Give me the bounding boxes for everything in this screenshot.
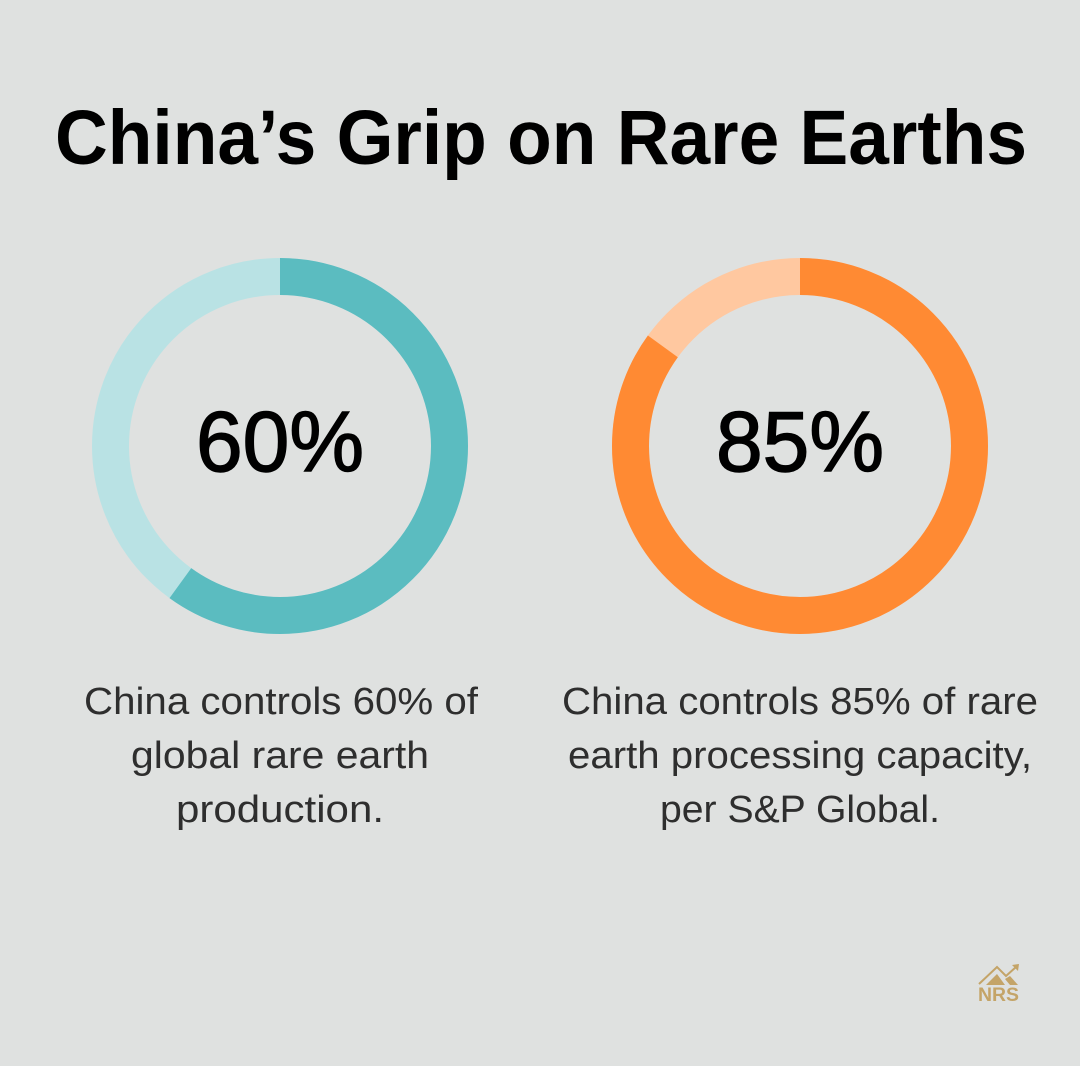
description: 85%: earth processing capacity,	[568, 735, 1032, 777]
description: 60%: production.	[176, 789, 384, 831]
description: 85%: China controls 85% of rare	[562, 681, 1038, 723]
icon: NRS logo: NRS	[978, 985, 1019, 1006]
description: 60%: China controls 60% of	[84, 681, 478, 723]
title: China’s Grip on Rare Earths	[55, 95, 1027, 181]
stat: 60%: 60%	[196, 395, 364, 490]
donut chart: 85%	[630, 276, 970, 616]
panel: 85% processing	[562, 276, 1038, 831]
panel: 60% production	[84, 276, 478, 831]
description: 60%	[84, 681, 478, 831]
description: 85%	[562, 681, 1038, 831]
donut chart: 60%	[110, 276, 450, 616]
icon: NRS logo	[978, 964, 1019, 1006]
stat: 85%: 85%	[716, 395, 884, 490]
description: 85%: per S&P Global.	[660, 789, 940, 831]
description: 60%: global rare earth	[131, 735, 429, 777]
